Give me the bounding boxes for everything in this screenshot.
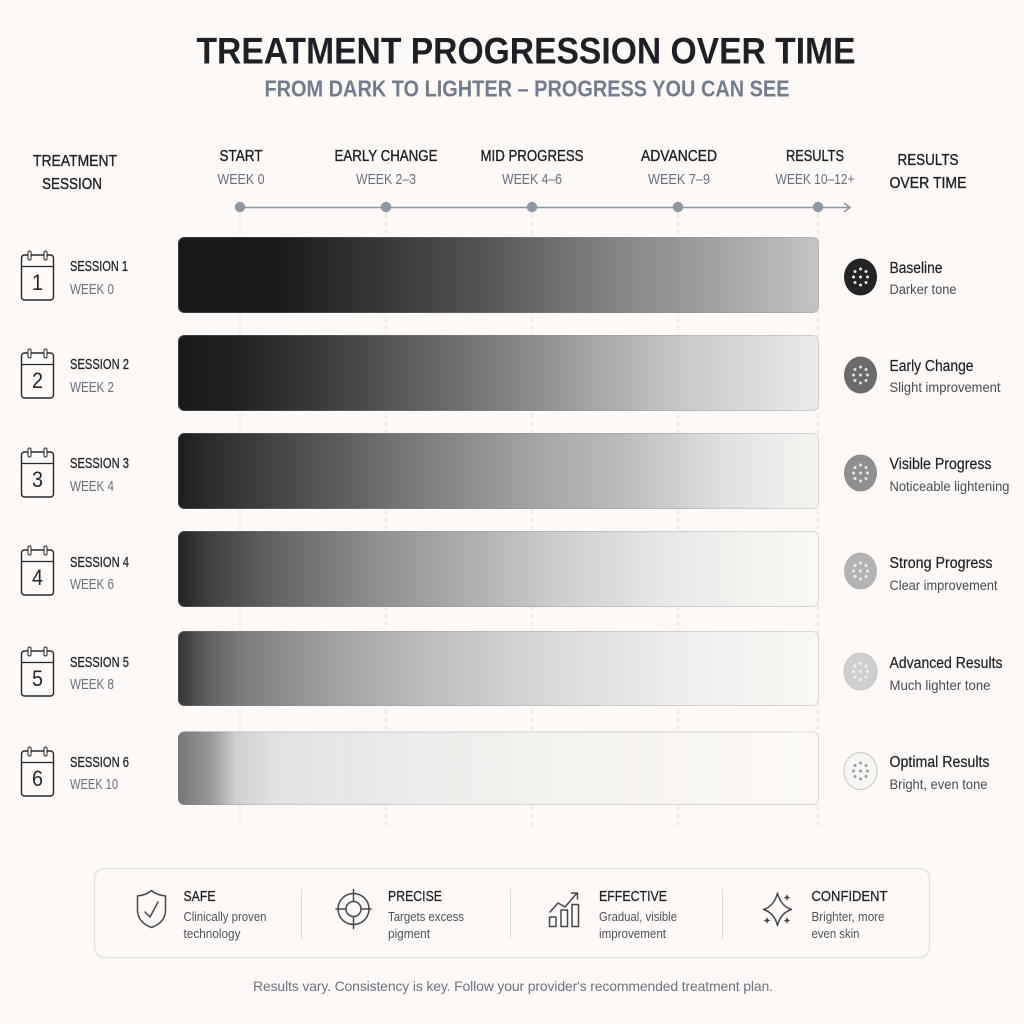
timeline labels: EARLY CHANGE: [334, 148, 438, 165]
benefit: safe: technology: [184, 927, 241, 941]
session label: WEEK 4: [70, 478, 114, 495]
timeline labels: ADVANCED: [641, 148, 717, 165]
result icon: [844, 552, 877, 590]
session label: WEEK 2: [70, 379, 114, 396]
right column heading: OVER TIME: [890, 175, 966, 192]
benefit: effective: EFFECTIVE: [599, 889, 667, 905]
benefit: safe: SAFE: [184, 889, 216, 905]
footer note: Results vary. Consistency is key. Follow your provider's recommended treatment plan.: [253, 978, 773, 994]
gradient bar: [178, 632, 818, 706]
subtitle: FROM DARK TO LIGHTER – PROGRESS YOU CAN SEE: [264, 76, 790, 102]
session label: WEEK 6: [70, 576, 114, 593]
result icon: [844, 356, 877, 394]
row: session 6: [22, 732, 990, 804]
benefit: precise: PRECISE: [388, 889, 442, 905]
benefit: effective: [599, 889, 677, 941]
session label: [70, 357, 129, 396]
icon: shield: [138, 890, 166, 928]
benefit: confident: Brighter, more: [812, 910, 885, 924]
result text: Darker tone: [890, 281, 957, 297]
left column heading: SESSION: [42, 176, 102, 193]
row: session 4: [22, 532, 998, 606]
benefit: precise: Targets excess: [388, 910, 464, 924]
result text: [890, 655, 1003, 693]
result icon: [844, 752, 877, 790]
timeline labels: WEEK 10–12+: [776, 171, 855, 188]
session label: WEEK 8: [70, 676, 114, 693]
result icon: [844, 258, 877, 296]
icon: calendar 4: [22, 546, 54, 595]
icon: calendar 6: [22, 747, 54, 796]
right column heading: RESULTS: [898, 152, 958, 169]
session label: [70, 259, 128, 298]
session label: SESSION 5: [70, 655, 129, 671]
row: session 3: [22, 434, 1010, 508]
result text: Bright, even tone: [890, 776, 988, 792]
icon: calendar 5: 5: [32, 666, 43, 691]
icon: calendar 6: 6: [32, 766, 43, 791]
result text: [890, 555, 998, 593]
session label: [70, 655, 129, 693]
left column heading: TREATMENT: [33, 153, 117, 170]
icon: calendar 1: 1: [32, 270, 43, 295]
benefit: confident: [812, 889, 888, 941]
gradient bar: [178, 532, 818, 606]
result text: Optimal Results: [890, 754, 990, 771]
icon: calendar 1: [22, 251, 54, 300]
timeline arrow: [235, 202, 850, 212]
title: TREATMENT PROGRESSION OVER TIME: [196, 30, 856, 72]
session label: WEEK 10: [70, 776, 118, 793]
result text: [890, 456, 1010, 494]
gradient bar: [178, 434, 818, 508]
session label: WEEK 0: [70, 281, 114, 298]
gradient bar: [178, 238, 818, 312]
benefit: confident: even skin: [812, 927, 860, 941]
row: session 2: [22, 336, 1001, 410]
timeline labels: WEEK 4–6: [502, 171, 562, 188]
icon: calendar 2: [22, 349, 54, 398]
benefit: precise: pigment: [388, 927, 430, 941]
panel: benefits: [94, 868, 930, 958]
result text: Slight improvement: [890, 379, 1001, 395]
result text: Baseline: [890, 260, 942, 277]
result text: [890, 754, 990, 792]
timeline labels: START: [220, 148, 263, 165]
benefit: safe: Clinically proven: [184, 910, 267, 924]
icon: sparkle: [764, 893, 792, 926]
icon: calendar 4: 4: [32, 565, 43, 590]
session label: SESSION 1: [70, 259, 128, 275]
icon: growth chart: [550, 893, 578, 926]
session label: SESSION 3: [70, 456, 129, 472]
result icon: [844, 653, 877, 690]
session label: SESSION 6: [70, 755, 129, 771]
left column heading: [33, 153, 117, 193]
result text: Visible Progress: [890, 456, 992, 473]
result text: Advanced Results: [890, 655, 1003, 672]
result text: [890, 358, 1001, 395]
timeline labels: WEEK 0: [218, 171, 264, 188]
session label: SESSION 4: [70, 555, 129, 571]
timeline labels: WEEK 7–9: [648, 171, 710, 188]
benefit: effective: improvement: [599, 927, 666, 941]
benefit: precise: [388, 889, 464, 941]
result text: Much lighter tone: [890, 677, 991, 693]
result text: [890, 260, 957, 297]
session label: [70, 755, 129, 793]
icon: calendar 5: [22, 647, 54, 696]
icon: target: [336, 890, 371, 928]
result text: Strong Progress: [890, 555, 993, 572]
right column heading: [890, 152, 966, 192]
benefit: safe: [184, 889, 267, 941]
timeline labels: MID PROGRESS: [480, 148, 584, 165]
result text: Clear improvement: [890, 577, 998, 593]
row: session 5: [22, 632, 1003, 706]
session label: [70, 456, 129, 495]
icon: calendar 3: 3: [32, 467, 43, 492]
timeline labels: [218, 148, 855, 188]
gradient bar: [178, 732, 818, 804]
timeline labels: WEEK 2–3: [356, 171, 416, 188]
result icon: [844, 454, 877, 492]
row: session 1: [22, 238, 957, 312]
result text: Noticeable lightening: [890, 478, 1010, 494]
session label: SESSION 2: [70, 357, 129, 373]
timeline labels: RESULTS: [786, 148, 844, 165]
benefit: effective: Gradual, visible: [599, 910, 677, 924]
icon: calendar 3: [22, 448, 54, 497]
result text: Early Change: [890, 358, 974, 375]
session label: [70, 555, 129, 593]
gradient bar: [178, 336, 818, 410]
benefit: confident: CONFIDENT: [812, 889, 888, 905]
icon: calendar 2: 2: [32, 368, 43, 393]
